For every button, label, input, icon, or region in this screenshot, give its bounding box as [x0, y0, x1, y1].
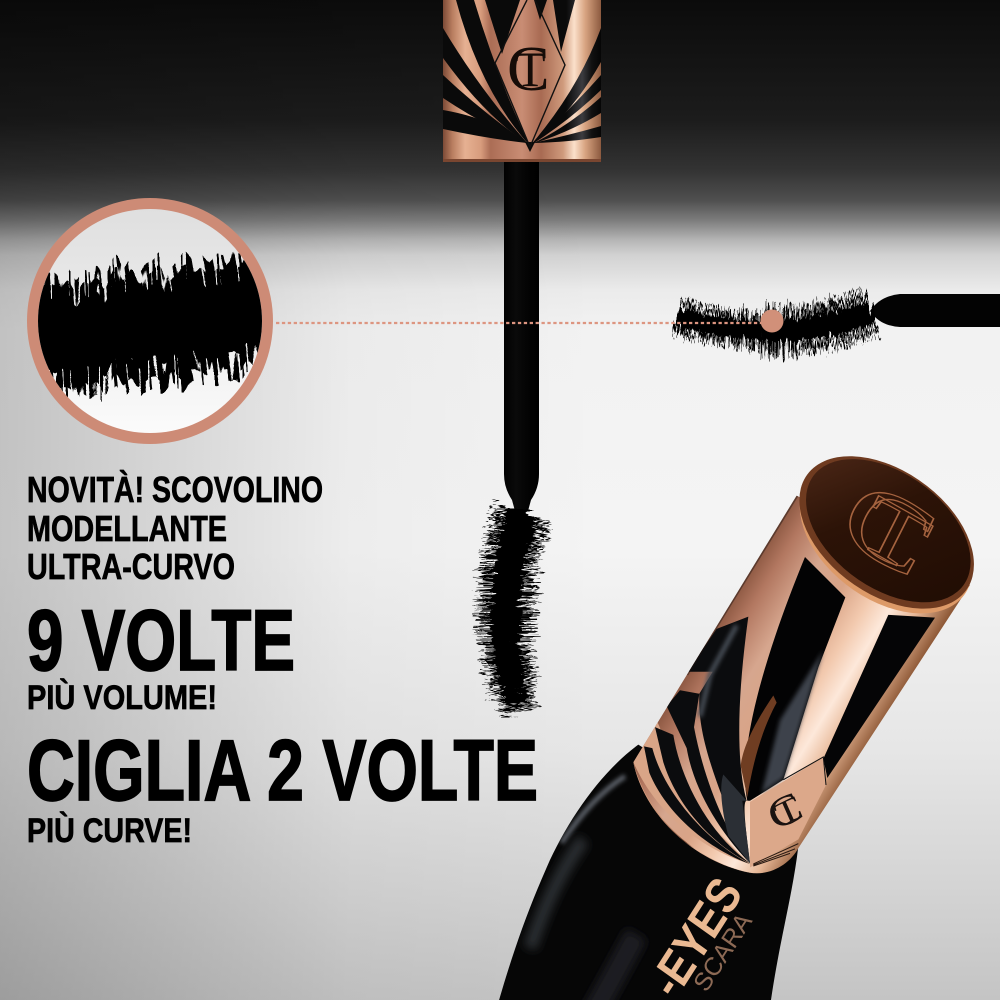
small logo: T [770, 790, 807, 834]
black wedge left [687, 617, 750, 863]
text block: new brush [27, 469, 323, 587]
art deco black rays [443, 0, 601, 152]
magnified bristles [25, 303, 275, 340]
small logo: C [761, 783, 810, 840]
dark upper edge [687, 496, 797, 675]
top face with monogram [773, 425, 1000, 645]
small logo [770, 793, 802, 826]
logo monogram [510, 48, 546, 90]
brush: horizontal curved spoolie [678, 312, 872, 331]
stat: 9 times more volume: PIÙ VOLUME! [27, 679, 217, 717]
wand: vertical stem [504, 160, 539, 511]
text block: new brush: ULTRA-CURVO [27, 546, 235, 587]
diamond panel [750, 757, 826, 867]
logo monogram: T [515, 41, 546, 97]
mascara cap top [443, 0, 601, 162]
big mascara tube [490, 425, 1000, 1000]
top face with monogram: T [845, 478, 943, 589]
text block: new brush: MODELLANTE [27, 508, 227, 549]
glossy black bottle [490, 745, 798, 1000]
logo monogram: C [507, 33, 550, 104]
stat: 9 times more volume [27, 593, 295, 717]
stat: lashes 2 times curvier: PIÙ CURVE! [27, 812, 192, 850]
product name on bottle: SCARA [689, 908, 758, 997]
stat: lashes 2 times curvier: CIGLIA 2 VOLTE [27, 723, 538, 819]
black fan stripes [667, 690, 750, 863]
magnified brush circle [25, 198, 275, 444]
brush: vertical curved spoolie [506, 512, 522, 713]
dotted connector line [276, 322, 770, 324]
text block: new brush: NOVITÀ! SCOVOLINO [27, 469, 323, 510]
cap rim [443, 159, 601, 162]
wand: horizontal stem [870, 294, 1000, 327]
stat: 9 times more volume: 9 VOLTE [27, 593, 295, 689]
diamond outline [495, 0, 565, 147]
top face with monogram: C [825, 456, 953, 599]
copper sliver [741, 696, 777, 797]
black right wedge [823, 615, 935, 778]
copper sleeve with deco pattern [633, 496, 970, 874]
stat: lashes 2 times curvier [27, 723, 538, 850]
callout dot on brush [760, 310, 784, 332]
black central wedge [745, 557, 845, 801]
